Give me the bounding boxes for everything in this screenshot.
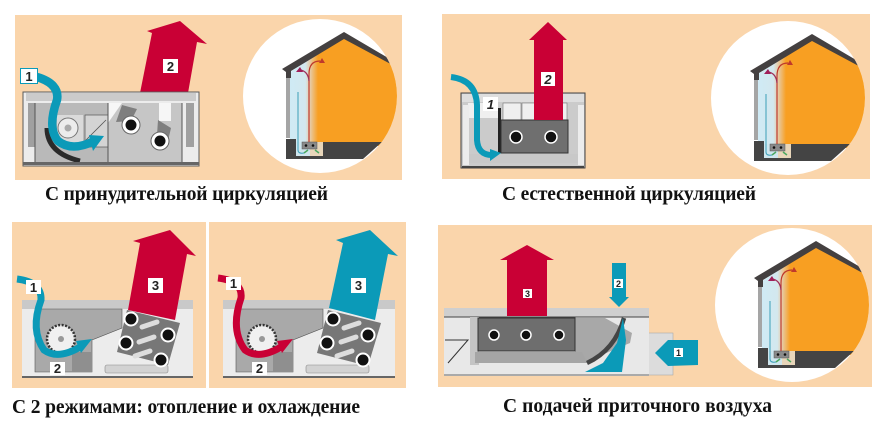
coil (317, 310, 381, 366)
label 2 (50, 361, 65, 376)
label 2 (614, 279, 623, 289)
convector cross-section (444, 308, 673, 376)
label 1 (226, 276, 241, 291)
arrow: warm air outflow (529, 22, 567, 120)
arrow: air from outside (655, 340, 698, 366)
caption: forced circulation: С принудительной циркуляцией (45, 184, 328, 205)
label 1 (674, 348, 683, 358)
arrow: warm air outflow (500, 245, 554, 316)
icon: house with convector (711, 21, 868, 175)
convector cross-section (22, 300, 193, 378)
arrow: swoosh of fresh air (585, 318, 626, 372)
label 2: 2 (54, 361, 61, 376)
arrow: warm air outflow (128, 230, 196, 320)
label 2: 2 (167, 59, 174, 74)
caption: fresh air supply: С подачей приточного воздуха (503, 396, 772, 417)
label 2: 2 (256, 361, 263, 376)
label 3: 3 (525, 289, 530, 299)
label 2 (252, 361, 267, 376)
arrow: room air intake (37, 77, 104, 151)
label 2 (163, 59, 178, 74)
label 3 (148, 278, 163, 293)
arrow: air from above (609, 263, 629, 307)
label 1: 1 (676, 348, 681, 358)
arrow: intake air (17, 279, 92, 354)
label 3: 3 (152, 278, 159, 293)
arrow: warm air outflow (140, 21, 207, 93)
label 1 (20, 68, 38, 84)
icon: house with convector (243, 19, 400, 173)
label 3: 3 (355, 278, 362, 293)
label 1: 1 (487, 97, 494, 112)
label 2: 2 (616, 279, 621, 289)
coil (117, 310, 180, 366)
label 2 (541, 72, 555, 87)
caption: natural circulation: С естественной циркуляцией (502, 184, 756, 205)
convector cross-section (461, 93, 585, 168)
label 2: 2 (543, 72, 552, 87)
panel: heating mode (12, 222, 206, 388)
label 1 (26, 280, 41, 295)
icon: house with convector (715, 228, 872, 382)
label 1 (483, 97, 498, 112)
panel: natural circulation (442, 14, 870, 179)
arrow: room air intake (451, 77, 501, 161)
caption: two modes: С 2 режимами: отопление и охлаждение (12, 397, 360, 418)
arrow: intake air (218, 278, 293, 354)
panel: forced circulation (15, 15, 402, 180)
convector cross-section (223, 300, 395, 378)
label 1: 1 (30, 280, 37, 295)
panel: fresh air supply (438, 225, 872, 387)
label 1: 1 (230, 276, 237, 291)
panel: cooling mode (209, 222, 406, 388)
label 1: 1 (25, 69, 33, 84)
arrow: cool air outflow (329, 230, 398, 320)
label 3 (351, 278, 366, 293)
convector cross-section (23, 92, 199, 166)
label 3 (523, 289, 532, 299)
